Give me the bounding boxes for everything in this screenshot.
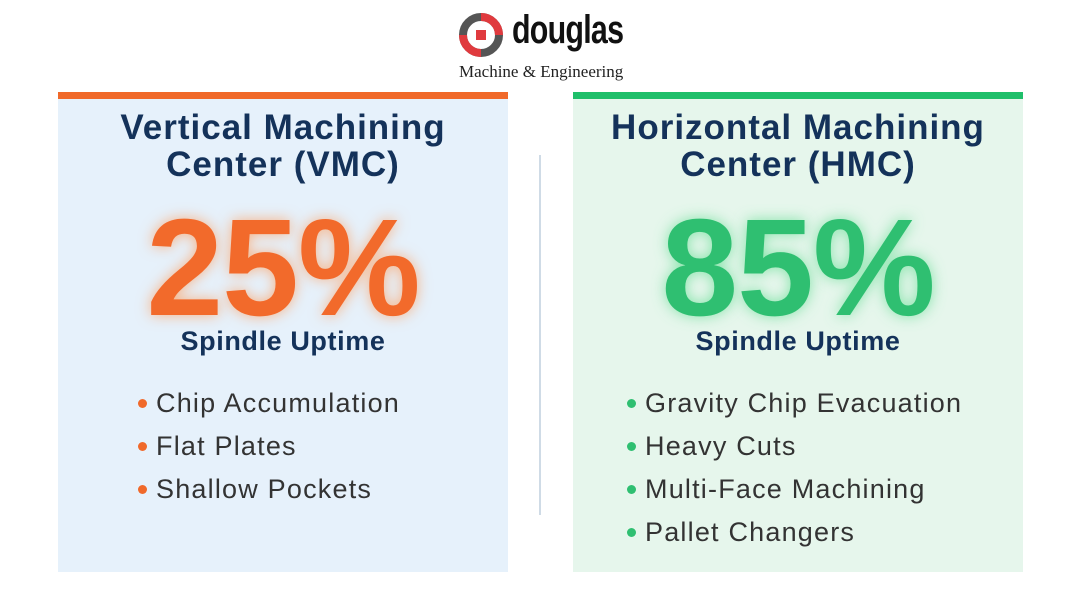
heading: HMC: Horizontal Machining <box>611 108 985 147</box>
panel: HMC <box>573 92 1023 572</box>
logo <box>459 8 623 81</box>
list: VMC bullets: Flat Plates <box>156 431 297 461</box>
icon: logo target <box>459 13 503 57</box>
logo: Machine & Engineering <box>459 62 623 81</box>
list: VMC bullets: Chip Accumulation <box>156 388 400 418</box>
list: VMC bullets <box>138 388 400 504</box>
heading: VMC: Vertical Machining <box>120 108 446 147</box>
label: spindle uptime: Spindle Uptime <box>181 326 385 356</box>
heading: VMC: Center (VMC) <box>166 145 400 184</box>
heading: HMC <box>611 108 985 184</box>
heading: HMC: Center (HMC) <box>680 145 916 184</box>
list: HMC bullets <box>627 388 962 547</box>
list: HMC bullets: Multi-Face Machining <box>645 474 926 504</box>
list: HMC bullets: Pallet Changers <box>645 517 855 547</box>
list: VMC bullets: Shallow Pockets <box>156 474 372 504</box>
stat: 85%: 85% <box>661 191 935 345</box>
logo: douglas <box>512 8 623 52</box>
heading: VMC <box>120 108 446 184</box>
stat: 25%: 25% <box>146 191 420 345</box>
label: spindle uptime: Spindle Uptime <box>696 326 900 356</box>
panel: VMC <box>58 92 508 572</box>
list: HMC bullets: Heavy Cuts <box>645 431 797 461</box>
list: HMC bullets: Gravity Chip Evacuation <box>645 388 962 418</box>
